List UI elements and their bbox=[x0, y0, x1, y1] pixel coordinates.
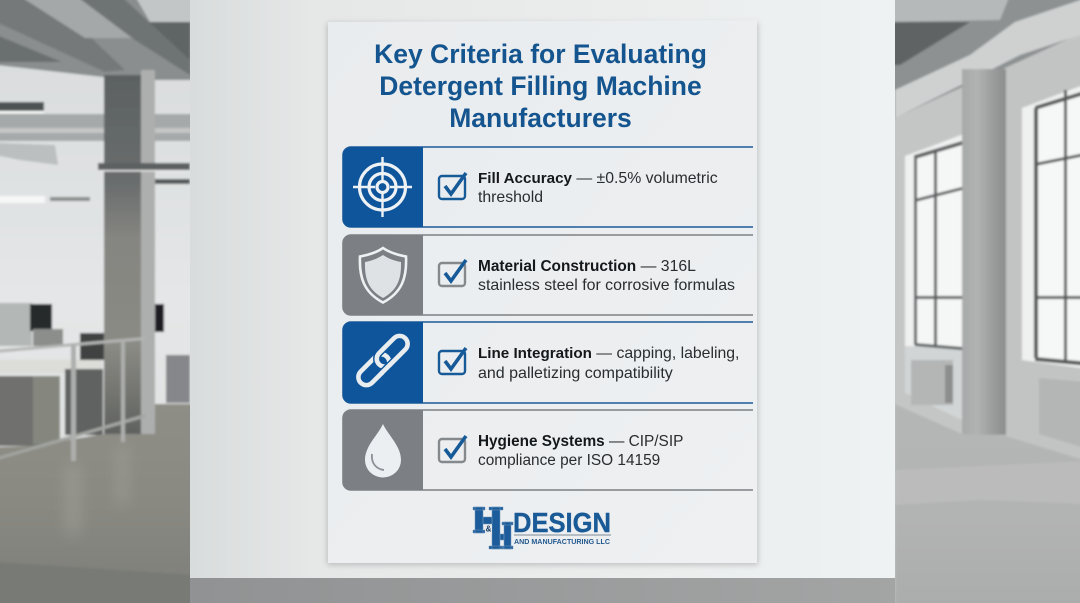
row 2: material construction bbox=[343, 235, 753, 315]
criterion text: compliance per ISO 14159 bbox=[478, 452, 660, 469]
title: Detergent Filling Machine bbox=[379, 71, 702, 101]
poster panel bbox=[328, 20, 757, 563]
criterion text: Hygiene Systems — CIP/SIP bbox=[478, 433, 683, 450]
title: Key Criteria for Evaluating bbox=[374, 39, 707, 69]
logo bbox=[473, 507, 611, 549]
icon panel: target bbox=[343, 147, 423, 227]
criterion text: Material Construction — 316L bbox=[478, 258, 696, 275]
logo: & bbox=[486, 524, 492, 534]
checkbox bbox=[439, 173, 466, 199]
checkbox bbox=[439, 348, 466, 374]
background: left office scene bbox=[0, 0, 195, 603]
criterion text: and palletizing compatibility bbox=[478, 365, 673, 382]
background: right loft scene bbox=[890, 0, 1080, 603]
row 1: fill accuracy bbox=[343, 147, 753, 227]
checkbox bbox=[439, 260, 466, 286]
row 4: hygiene systems bbox=[343, 410, 753, 490]
criterion text: Fill Accuracy — ±0.5% volumetric bbox=[478, 170, 718, 187]
icon panel: chain link bbox=[343, 322, 423, 403]
title: Manufacturers bbox=[449, 103, 632, 133]
logo: DESIGN bbox=[513, 507, 611, 538]
title bbox=[374, 39, 707, 133]
criterion text: Line Integration — capping, labeling, bbox=[478, 345, 739, 362]
logo: AND MANUFACTURING LLC bbox=[514, 537, 611, 546]
background: left floor reflections bbox=[65, 445, 128, 535]
criterion text: stainless steel for corrosive formulas bbox=[478, 277, 735, 294]
poster shadow bbox=[327, 23, 758, 565]
row 3: line integration bbox=[343, 322, 753, 403]
criterion text: threshold bbox=[478, 189, 543, 206]
checkbox bbox=[439, 436, 466, 462]
icon panel: shield bbox=[343, 235, 423, 315]
icon panel: water drop bbox=[343, 410, 423, 490]
background: display wall and floor strip bbox=[190, 0, 895, 603]
